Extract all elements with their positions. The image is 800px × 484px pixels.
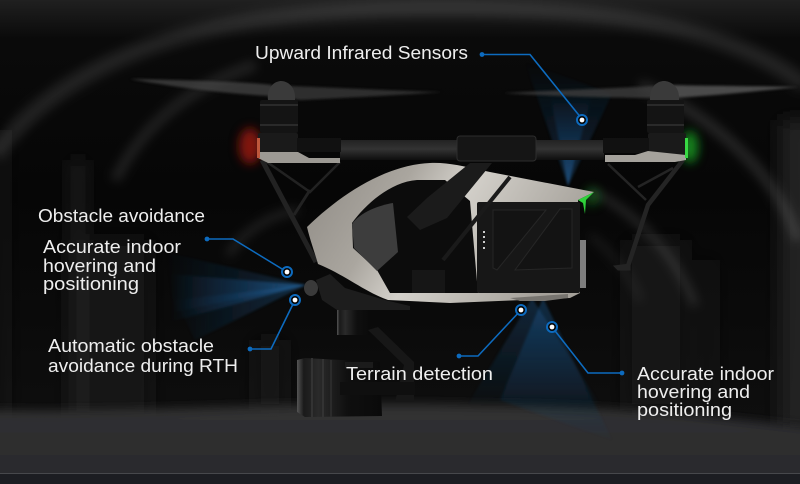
callout: automatic obstacle avoidance during RTH: Automatic obstacle (48, 335, 214, 356)
drone (130, 79, 798, 417)
floor (0, 404, 800, 484)
gray side door (352, 203, 398, 271)
footer bar (0, 473, 800, 484)
callout: upward infrared sensors (255, 42, 587, 125)
callout: obstacle avoidance: Obstacle avoidance (38, 205, 205, 226)
gimbal ball (304, 280, 318, 296)
sensor beams (165, 62, 612, 440)
callout: obstacle avoidance (38, 205, 292, 277)
status light glows (239, 128, 698, 206)
callout: terrain detection: Terrain detection (346, 363, 493, 384)
gimbal motor (337, 310, 370, 335)
text: accurate indoor hovering left: Accurate indoor (43, 236, 181, 257)
angled tube (407, 163, 492, 230)
tunnel arches (0, 8, 800, 305)
callout: accurate indoor hovering right: hovering and (637, 381, 750, 402)
text: accurate indoor hovering left: hovering and (43, 255, 156, 276)
left landing gear (262, 160, 340, 262)
callout: accurate indoor hovering right: Accurate indoor (637, 363, 774, 384)
gimbal arm (368, 327, 414, 402)
left motor (257, 81, 341, 163)
gimbal damper (316, 274, 410, 310)
callout: accurate indoor hovering right (547, 322, 774, 420)
right landing gear (608, 160, 683, 270)
bottom sensor pad (510, 294, 568, 301)
text: accurate indoor hovering left: positioning (43, 273, 139, 294)
thin strut (443, 177, 510, 260)
battery (477, 202, 586, 293)
body shell (307, 163, 594, 303)
center arm block (457, 136, 536, 161)
center electronics (412, 270, 445, 293)
camera (297, 358, 415, 417)
green nose light (578, 192, 594, 214)
callout: automatic obstacle avoidance during RTH (48, 295, 300, 376)
right motor (603, 81, 688, 162)
center cavity (352, 180, 478, 293)
carbon arm (340, 140, 604, 160)
callout: automatic obstacle avoidance during RTH: avoidance during RTH (48, 355, 238, 376)
callout: upward infrared sensors: Upward Infrared Sensors (255, 42, 468, 63)
text: accurate indoor hovering left (43, 236, 181, 294)
tunnel columns (0, 120, 800, 430)
callout: accurate indoor hovering right: positioning (637, 399, 732, 420)
propellers (130, 79, 798, 100)
callout: terrain detection (346, 305, 526, 384)
